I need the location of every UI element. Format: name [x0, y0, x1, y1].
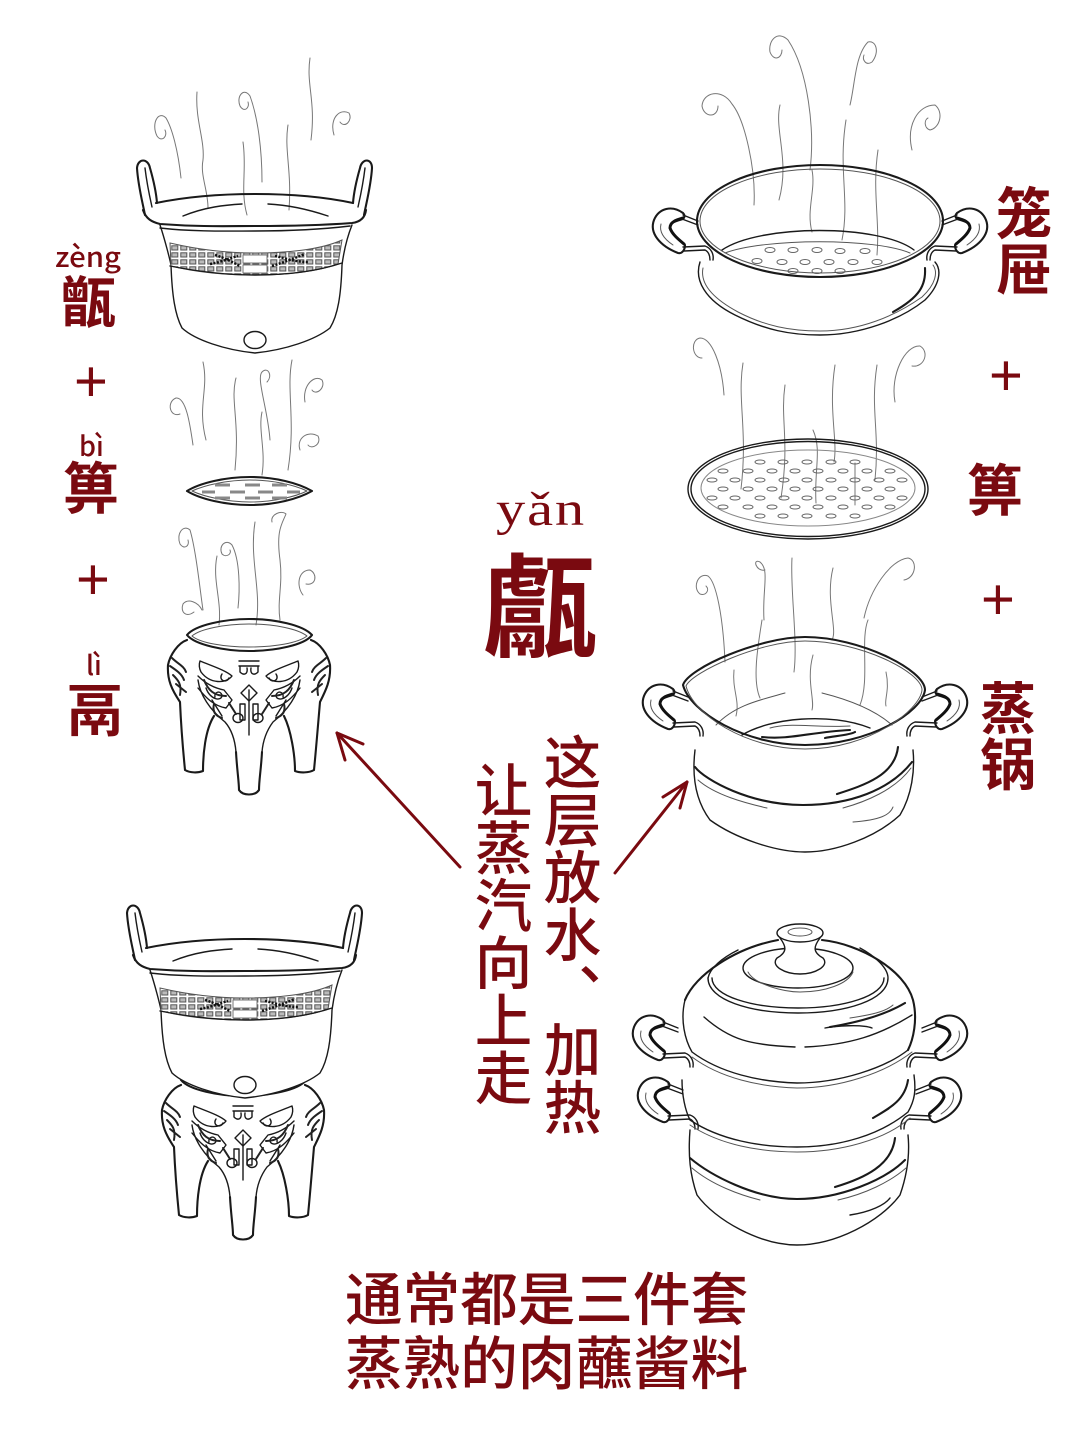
plus: + [74, 349, 108, 414]
caption [345, 1269, 748, 1397]
title: yan: yǎn [496, 482, 586, 536]
label: li: lì [86, 644, 102, 683]
caption: 通常都是三件套 [345, 1269, 748, 1333]
steamer: tier with holes [653, 165, 987, 335]
label: zeng [55, 236, 121, 335]
label: bi: bì [79, 425, 104, 464]
label: plate: 箅 [967, 460, 1023, 523]
label: bi [63, 425, 119, 521]
side note: steam rises: 让蒸汽向上走 [466, 761, 530, 1106]
plus: + [989, 343, 1023, 408]
label: zeng: 甑 [60, 272, 116, 335]
arrow: to li [337, 733, 460, 867]
label: bi: 箅 [63, 458, 119, 521]
arrow: to pot [615, 782, 687, 873]
caption: 蒸熟的肉蘸酱料 [345, 1333, 748, 1397]
steam: right middle plate [693, 338, 925, 505]
assembled steamer [633, 924, 967, 1245]
pot: base with water [643, 637, 967, 852]
steam: left upper vessel [155, 58, 350, 215]
side note: water layer: 这层放水、加热 [534, 733, 598, 1136]
title: yan [483, 482, 597, 674]
label: steamer: 屉 [996, 239, 1052, 302]
steam: left middle grate [170, 360, 323, 475]
assembled yan: bronze [127, 906, 362, 1240]
plus: + [981, 567, 1015, 632]
grate: left bi [187, 477, 312, 505]
steam: left lower li [179, 512, 315, 625]
label: pot: 锅 [980, 734, 1036, 797]
plate: right bi [688, 439, 928, 539]
title: yan: 甗 [483, 547, 597, 674]
label: li: 鬲 [67, 680, 123, 743]
label: li [67, 644, 123, 743]
label: pot [980, 678, 1036, 797]
label: steamer [996, 183, 1052, 302]
steam: right bottom pot [696, 558, 914, 716]
label: zeng: zèng [55, 236, 121, 275]
vessel: li lower part [168, 619, 330, 794]
label: pot: 蒸 [980, 678, 1036, 741]
vessel: zeng upper part [137, 160, 372, 353]
plus: + [76, 547, 110, 612]
steam: right top steamer [702, 36, 940, 255]
label: steamer: 笼 [996, 183, 1052, 246]
